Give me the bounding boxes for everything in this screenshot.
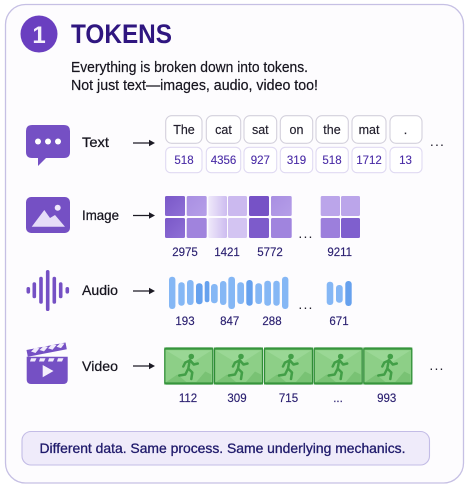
film frames (164, 348, 412, 384)
patch group 1421 (208, 196, 247, 238)
token row: video frames (164, 348, 445, 405)
patch ids: 5772 (257, 247, 283, 259)
ellipsis: ... (430, 133, 445, 149)
intro text: Everything is broken down into tokens. (71, 60, 308, 76)
callout (22, 432, 430, 465)
arrow: text (133, 140, 155, 146)
token ids: 319 (287, 155, 306, 167)
icon: audio waveform (26, 270, 69, 311)
audio ids: 847 (220, 316, 239, 328)
arrow: video (133, 363, 155, 369)
number badge (20, 16, 58, 52)
intro text (71, 60, 318, 94)
word tokens: sat (252, 123, 269, 137)
token ids: 927 (251, 155, 270, 167)
patch group 9211 (321, 196, 360, 238)
token ids: 518 (322, 155, 342, 167)
audio ids: 288 (262, 316, 282, 328)
word tokens: The (173, 123, 195, 137)
word tokens: on (290, 123, 303, 137)
label: image: Image (82, 207, 119, 223)
word tokens (166, 116, 422, 143)
frame ids: 309 (227, 393, 247, 405)
word tokens: . (404, 123, 407, 137)
patch group 5772 (249, 196, 292, 238)
token ids: 1712 (356, 155, 382, 167)
token row: text (166, 116, 445, 173)
arrow: image (133, 212, 155, 219)
token row: audio bars (169, 277, 352, 328)
arrow: audio (133, 288, 155, 294)
word tokens: the (323, 123, 341, 137)
word tokens: mat (359, 123, 380, 137)
audio ids: 671 (329, 316, 349, 328)
audio bars group two (327, 281, 352, 306)
audio bars group one (169, 277, 288, 309)
token ids: 518 (174, 155, 194, 167)
number badge: 1 (32, 22, 46, 49)
frame ids: ... (333, 393, 343, 405)
frame ids: 112 (179, 393, 197, 405)
icon: image (26, 197, 70, 233)
token ids (166, 147, 422, 173)
icon: video clapperboard (26, 342, 68, 384)
frame ids: 715 (279, 393, 298, 405)
word tokens: cat (215, 123, 232, 137)
icon: text speech bubble (26, 125, 70, 166)
intro text: Not just text—images, audio, video too! (71, 78, 318, 94)
token row: image patches (165, 196, 360, 259)
token ids: 13 (399, 155, 412, 167)
patch ids: 9211 (327, 247, 352, 259)
ellipsis: ... (298, 225, 314, 241)
patch ids: 1421 (214, 247, 240, 259)
callout: Different data. Same process. Same underlying mechanics. (40, 440, 406, 456)
ellipsis: ... (298, 296, 314, 312)
frame ids (179, 393, 396, 405)
label: video: Video (82, 358, 118, 374)
label: audio: Audio (82, 282, 118, 298)
audio ids (175, 316, 349, 328)
label: text: Text (82, 134, 109, 150)
patch ids (172, 247, 352, 259)
audio ids: 193 (175, 316, 195, 328)
title: TOKENS (71, 19, 172, 49)
patch ids: 2975 (172, 247, 198, 259)
ellipsis: ... (429, 357, 445, 373)
token ids: 4356 (211, 155, 236, 167)
patch group 2975 (165, 196, 207, 238)
frame ids: 993 (377, 393, 396, 405)
